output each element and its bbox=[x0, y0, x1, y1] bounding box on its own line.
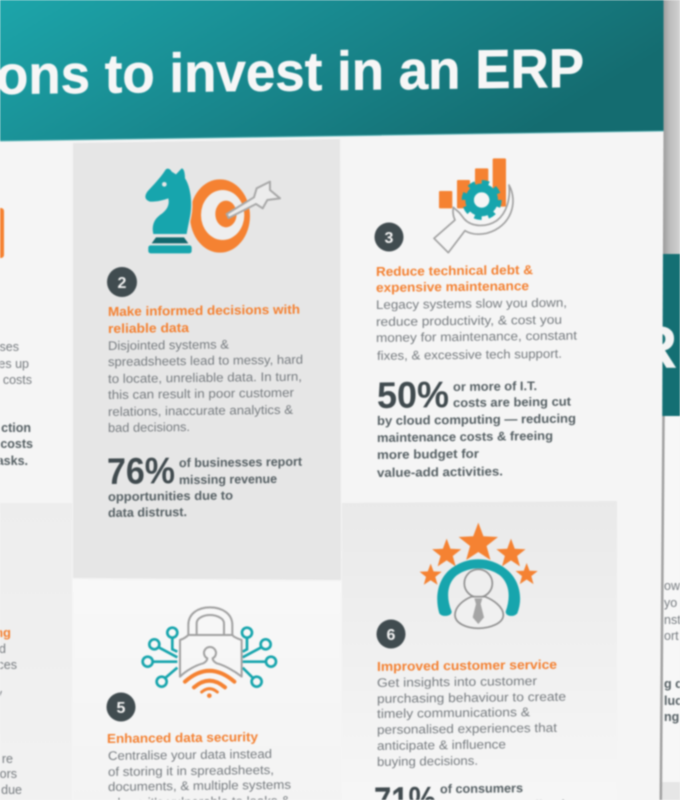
panel: 4 fragment: re bbox=[2, 752, 13, 766]
stat 50%: 50% bbox=[377, 374, 449, 416]
heading and body 5: documents, & multiple systems bbox=[108, 778, 291, 794]
stat 50%: maintenance costs & freeing bbox=[377, 429, 553, 445]
second page behind: yo bbox=[664, 596, 677, 610]
number badge 5 bbox=[106, 692, 136, 722]
stat 71%: of consumers bbox=[440, 781, 523, 796]
panel: 1 fragment: costs bbox=[0, 437, 33, 451]
number badge 6: 6 bbox=[387, 627, 396, 644]
icon: wrench gear and bars bbox=[434, 158, 513, 253]
title banner bbox=[0, 0, 664, 141]
panel: 5 data security bbox=[106, 607, 291, 800]
heading and body 2: reliable data bbox=[108, 320, 190, 336]
stat 76%: 76% bbox=[107, 450, 175, 492]
heading and body 6: timely communications & bbox=[377, 705, 531, 721]
stat 71% bbox=[374, 778, 565, 800]
stat 50%: costs are being cut bbox=[453, 395, 572, 410]
panel: 1 fragment: ses bbox=[0, 340, 19, 354]
heading and body 6: purchasing behaviour to create bbox=[377, 690, 566, 706]
heading and body 3 bbox=[376, 262, 578, 363]
panel: 5 background bbox=[73, 580, 341, 800]
panel: 3 technical debt bbox=[374, 158, 578, 480]
heading and body 6: anticipate & influence bbox=[377, 737, 506, 753]
stat 76%: data distrust. bbox=[108, 505, 187, 520]
number badge 3: 3 bbox=[385, 230, 394, 247]
second page behind: R bbox=[634, 314, 677, 381]
second page behind bbox=[634, 0, 680, 800]
heading and body 3: fixes, & excessive tech support. bbox=[377, 347, 562, 363]
heading and body 3: Legacy systems slow you down, bbox=[376, 296, 567, 312]
heading and body 2: to locate, unreliable data. In turn, bbox=[108, 370, 302, 386]
panel: 4 fragment: ors bbox=[0, 767, 17, 781]
stat 50%: value-add activities. bbox=[377, 464, 503, 480]
heading and body 3: reduce productivity, & cost you bbox=[376, 313, 562, 329]
stat 76%: of businesses report bbox=[179, 455, 303, 470]
stat 50% bbox=[377, 373, 576, 480]
heading and body 5 bbox=[107, 729, 291, 800]
heading and body 2: Make informed decisions with bbox=[108, 302, 300, 319]
second page behind: ort bbox=[664, 629, 679, 643]
icon: stars and customer bbox=[420, 523, 538, 628]
panel: 6 background bbox=[342, 501, 617, 800]
heading and body 6: Get insights into customer bbox=[377, 674, 537, 690]
page edge shadow bbox=[661, 416, 664, 800]
number badge 5: 5 bbox=[117, 700, 126, 717]
heading and body 2: relations, inaccurate analytics & bbox=[108, 403, 294, 419]
number badge 2: 2 bbox=[118, 275, 127, 292]
panel: 1 fragment bbox=[0, 208, 33, 468]
stat 76% bbox=[107, 449, 303, 520]
number badge 3 bbox=[374, 222, 404, 252]
panel: 1 fragment: costs bbox=[3, 373, 32, 387]
heading and body 2 bbox=[108, 302, 303, 435]
heading and body 3: money for maintenance, constant bbox=[376, 329, 578, 345]
panel: 2 informed decisions bbox=[73, 139, 341, 580]
second page behind: ow bbox=[664, 579, 680, 593]
icon: chess knight and target bbox=[145, 168, 280, 253]
heading and body 6: buying decisions. bbox=[377, 754, 478, 769]
second page behind: ng bbox=[664, 710, 679, 724]
heading and body 6 bbox=[377, 657, 566, 769]
stat 50%: more budget for bbox=[377, 447, 479, 462]
heading and body 2: this can result in poor customer bbox=[108, 386, 294, 402]
stat 50%: by cloud computing — reducing bbox=[377, 412, 576, 428]
heading and body 3: expensive maintenance bbox=[376, 278, 529, 295]
panel: 1 fragment: ction bbox=[1, 421, 31, 435]
icon: padlock with circuit and wifi bbox=[143, 607, 276, 698]
heading and body 2: bad decisions. bbox=[108, 420, 190, 435]
panel: 4 fragment bbox=[0, 503, 72, 800]
stat 76%: opportunities due to bbox=[108, 488, 233, 504]
panel: 6 customer service bbox=[374, 523, 566, 800]
stat 76%: missing revenue bbox=[179, 472, 277, 487]
number badge 6 bbox=[376, 620, 406, 648]
heading and body 2: spreadsheets lead to messy, hard bbox=[108, 353, 303, 369]
heading and body 5: Centralise your data instead bbox=[108, 747, 272, 763]
panel: 4 fragment: due bbox=[1, 783, 22, 797]
heading and body 6: Improved customer service bbox=[377, 657, 557, 674]
title banner: ons to invest in an ERP bbox=[0, 37, 584, 106]
number badge 2 bbox=[107, 267, 137, 297]
heading and body 2: Disjointed systems & bbox=[108, 338, 230, 353]
stat 50%: or more of I.T. bbox=[453, 379, 537, 394]
heading and body 5: Enhanced data security bbox=[107, 729, 259, 746]
heading and body 6: personalised experiences that bbox=[377, 721, 558, 737]
heading and body 3: Reduce technical debt & bbox=[376, 262, 533, 279]
heading and body 5: of storing it in spreadsheets, bbox=[108, 763, 274, 779]
